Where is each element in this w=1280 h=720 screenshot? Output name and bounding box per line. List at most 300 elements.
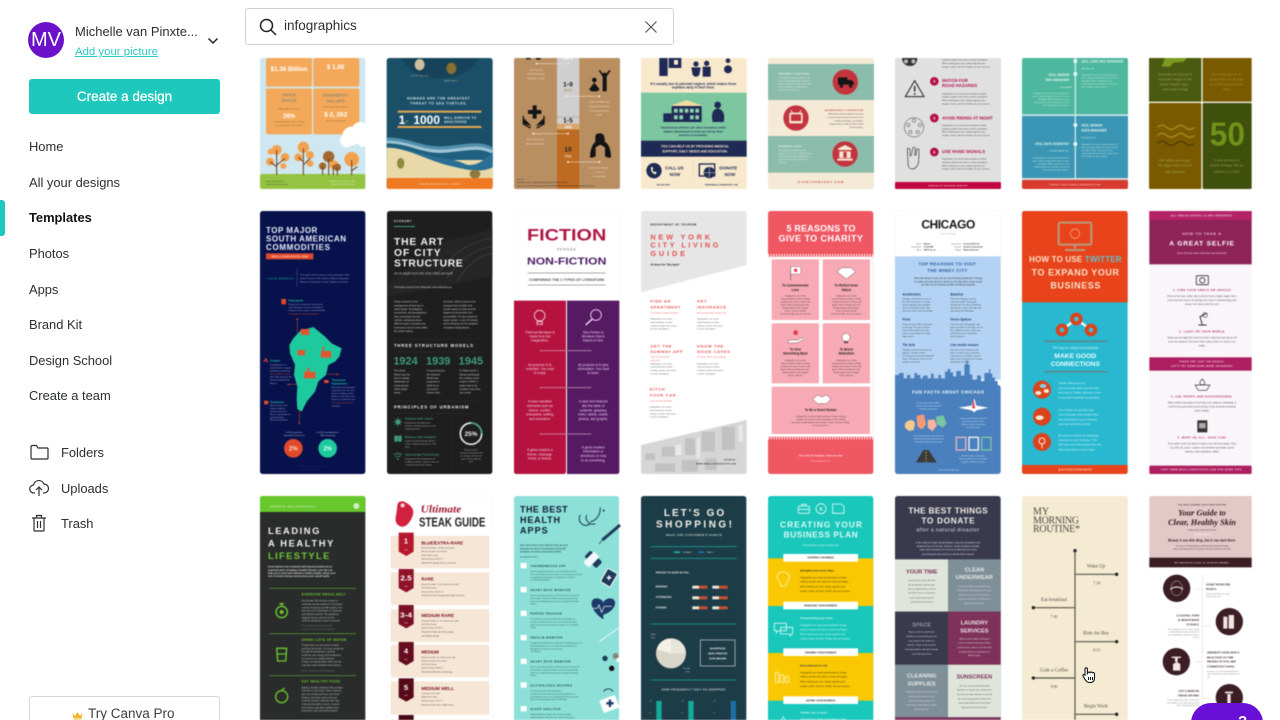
thumbnail: Twitter connections: Be sure to search for hashtags xyxy=(1058,433,1099,437)
thumbnail: Chicago city guide: parks to explore in Chicago. One of xyxy=(950,326,983,329)
thumbnail: fiction versus non-fiction: It uses text features xyxy=(579,400,608,404)
thumbnail: guide to clear healthy skin: BASICS. xyxy=(1206,587,1217,591)
thumbnail: Chicago city guide: path along Lake Michigan. xyxy=(950,310,975,313)
thumbnail: art of city structure: building materials, systems that are xyxy=(405,461,440,464)
thumbnail: South American commodities: LATIN AMERICA xyxy=(267,277,294,281)
thumbnail: the best health apps: attractive as what is interestingly among with xyxy=(520,547,567,550)
thumbnail: South American commodities: Mato Grosso is the xyxy=(270,404,289,407)
thumbnail: creating your business plan: EXITING YOUR BUSINESS xyxy=(806,700,836,702)
thumbnail: best things to donate: comes to donations, and there's a xyxy=(958,598,991,601)
thumbnail: ultimate steak guide: Seared Outside, 1 1/2 minutes each side xyxy=(421,583,460,586)
thumbnail: art of city structure: within urban xyxy=(394,388,408,391)
thumbnail: Chicago city guide: FUN FACTS ABOUT CHICAGO xyxy=(912,390,985,395)
thumbnail: art of city structure: D. Pabel and E. L. xyxy=(459,370,480,373)
thumbnail: best things to donate: whatever they can to help. However, certain donations actually xyxy=(917,545,980,548)
thumbnail: Chicago city guide: miss are the Navy Tower, John xyxy=(902,307,930,310)
thumbnail: South American commodities: expected to recover to xyxy=(283,434,305,437)
thumbnail: 5 reasons to give to charity: simply organize your images, xyxy=(833,306,860,309)
thumbnail: Chicago city guide: There are over 500 gardens and xyxy=(950,323,980,326)
thumbnail: let's go shopping: Male xyxy=(651,634,656,636)
thumbnail: orphan charity: WWW.REALLYGREATSITE.COM xyxy=(705,184,738,187)
thumbnail: the best health apps: to stop talking to the doctors as a big illness. Used first xyxy=(530,576,576,579)
thumbnail: art of city structure: assets, traditional practices, and xyxy=(405,443,437,446)
thumbnail: ultimate steak guide: MEDIUM WELL xyxy=(421,686,454,691)
thumbnail: New York city living guide: making complex info easier xyxy=(697,369,723,372)
thumbnail: Twitter connections: TO EXPAND YOUR xyxy=(1032,267,1119,277)
thumbnail: orphan charity: 555.958.7890 xyxy=(657,185,671,187)
thumbnail: creating your business plan xyxy=(768,496,873,720)
thumbnail: leading a healthy lifestyle: Get at least 150 minutes a week of xyxy=(302,600,338,603)
thumbnail: Dolomites olive blocks: World Heritage Site by xyxy=(1210,163,1244,167)
thumbnail: guide to clear healthy skin: Beauty is not skin deep, but it can start there. xyxy=(1167,539,1236,543)
thumbnail: leading a healthy lifestyle: LIFESTYLE xyxy=(268,551,329,561)
thumbnail: how to take a great selfie: VISIT WWW.REALLYGREATSITE.COM FOR MORE TIPS xyxy=(1161,469,1242,472)
thumbnail: ultimate steak guide: STEAK GUIDE xyxy=(419,515,486,530)
thumbnail: South American commodities: Mexico, Costa Rica and xyxy=(332,395,355,398)
thumbnail: motorcycle safety tips: When making your own, simply organize your xyxy=(942,164,986,167)
thumbnail: Chicago city guide: Chicago is home to the finest art xyxy=(902,349,932,352)
thumbnail: ultimate steak guide: Slight hint of pink xyxy=(421,696,438,699)
thumbnail: Dolomites olive blocks: with seawater xyxy=(1165,170,1186,174)
thumbnail: South American commodities: natural resources that speaks 3 different languages xyxy=(300,277,349,280)
thumbnail: best things to donate: CLEAN xyxy=(965,567,984,573)
thumbnail: ultimate steak guide: MEDIUM RARE xyxy=(421,613,454,618)
thumbnail: ultimate steak guide: Should feel fairly soft, fairly spongy xyxy=(421,631,454,634)
thumbnail: 5 reasons to give to charity: Love xyxy=(792,288,799,292)
thumbnail: leading a healthy lifestyle: IMPROVE SAN FRANCISCO xyxy=(270,504,316,508)
thumbnail: South American commodities: with Chile being an the xyxy=(270,375,293,378)
thumbnail: startup sage and red: ADVERTISING & PROMOTION xyxy=(825,109,863,112)
thumbnail: ultimate steak guide: Should feel fairly firm and springy xyxy=(421,671,453,674)
thumbnail: fiction versus non-fiction: It gives readers xyxy=(582,445,605,449)
thumbnail: guide to clear healthy skin: The way to a healthy, glowing complexion goes beyond anti-aging xyxy=(1175,545,1229,548)
thumbnail: Chicago city guide: Western Avenue is the world's xyxy=(959,458,988,461)
thumbnail: fiction versus non-fiction: information. You read xyxy=(578,367,609,371)
thumbnail: leading a healthy lifestyle: It helps flush out your body of waste xyxy=(302,644,340,647)
thumbnail: South American commodities: category xyxy=(332,405,341,408)
thumbnail: Chicago city guide: The city is in love with jazz and xyxy=(950,349,978,352)
thumbnail: brown health timeline: is same as xyxy=(594,172,604,174)
thumbnail: leading a healthy lifestyle: through life dehydrated, causing xyxy=(302,651,336,654)
thumbnail: South American commodities: Brazil's production xyxy=(270,419,288,422)
thumbnail: resume career timeline: 2013, SENIOR xyxy=(1048,73,1070,77)
thumbnail: art of city structure: Homer Hoyt. xyxy=(427,392,441,395)
thumbnail: let's go shopping: 100 xyxy=(649,700,652,702)
thumbnail: ultimate steak guide: 50% Red Center xyxy=(421,623,437,626)
thumbnail: Chicago city guide: in Chicago. The city is home to xyxy=(902,326,931,329)
thumbnail: New York city living guide: making complex info easier xyxy=(697,324,723,327)
thumbnail: startup sage and red: system to improve products from one xyxy=(778,83,812,86)
thumbnail: ultimate steak guide: 25% Red Center xyxy=(421,663,437,666)
thumbnail: art of city structure: Model was xyxy=(427,377,439,380)
thumbnail: fiction versus non-fiction: based on fact. xyxy=(583,338,604,342)
thumbnail: art of city structure: space syntax - a set of theories xyxy=(443,319,478,322)
thumbnail: my morning routine timeline: MORNING xyxy=(1033,515,1079,526)
thumbnail: resume career timeline: text. Finally, cite your sources. xyxy=(1081,85,1108,88)
thumbnail: sea turtles: 1 xyxy=(399,113,406,127)
thumbnail: guide to clear healthy skin: Develop a clear routine by developing what xyxy=(1207,670,1239,673)
thumbnail: New York city living guide: DEPARTMENT OF TOURISM xyxy=(650,222,697,226)
thumbnail: motorcycle safety tips: When making your own, simply organize your xyxy=(942,131,986,134)
thumbnail: 5 reasons to give to charity: representations of data, making xyxy=(832,297,861,300)
thumbnail: leading a healthy lifestyle: processes, such as blood pressure. xyxy=(302,710,339,713)
thumbnail: guide to clear healthy skin: It appears you can be right at home xyxy=(1188,529,1216,532)
thumbnail: leading a healthy lifestyle: moderate aerobic activity or 75 minutes xyxy=(302,603,343,606)
thumbnail: best things to donate: time to organizations such as xyxy=(908,588,936,591)
thumbnail: my morning routine timeline: ROUTINE* xyxy=(1033,524,1080,535)
thumbnail: sea turtles: WILL SURVIVE TO xyxy=(444,116,477,120)
thumbnail: art of city structure: have developed several xyxy=(394,315,421,318)
thumbnail: startup sage and red: Advertising and promoting the business xyxy=(829,113,863,116)
thumbnail: South American commodities: 90% of this total in this xyxy=(332,402,353,405)
thumbnail: startup sage and red: so be ready to set it up. xyxy=(778,89,799,92)
thumbnail: 5 reasons to give to charity: simply organize your images, xyxy=(782,306,809,309)
thumbnail: South American commodities: world leader in copper xyxy=(270,366,291,369)
thumbnail: fiction versus non-fiction: entertain. You read xyxy=(526,367,554,371)
search bar xyxy=(245,8,674,45)
thumbnail: guide to clear healthy skin: CURRENTLY USING. xyxy=(1207,664,1235,668)
thumbnail: ultimate steak guide: Internal Temp: 57-63° C xyxy=(421,627,444,630)
thumbnail: how to take a great selfie: ALL SMILES DENTAL CLINIC PRESENTS: xyxy=(1171,215,1233,218)
thumbnail: ultimate steak guide: BLUE/EXTRA-RARE xyxy=(421,540,463,545)
thumbnail: art of city structure: the multiple nuclei xyxy=(459,377,480,380)
thumbnail: 5 reasons to give to charity: GIVE TO CHARITY xyxy=(778,233,863,243)
thumbnail: 5 reasons to give to charity: To Boost xyxy=(840,347,854,351)
thumbnail: leading a healthy lifestyle: DRINK LOTS OF WATER xyxy=(302,638,347,642)
thumbnail: orange wildlife statistics: $ 1.00 xyxy=(327,64,345,71)
thumbnail: New York city living guide: YOUR CAR xyxy=(650,392,676,397)
thumbnail: how to take a great selfie: memory. And remember: smile! xyxy=(1185,451,1219,454)
try canva pro button xyxy=(29,696,220,720)
thumbnail: New York city living guide: FIND AN xyxy=(650,299,671,304)
thumbnail: South American commodities: www.reallygreatsite.com xyxy=(300,468,320,471)
thumbnail: creating your business plan: Communicating your vision. xyxy=(800,617,834,620)
thumbnail: let's go shopping: FEMALE xyxy=(683,551,692,554)
thumbnail: my morning routine timeline: MY xyxy=(1033,507,1049,518)
thumbnail: best things to donate: With dirty water lines and sewers xyxy=(906,691,937,694)
thumbnail: motorcycle safety tips: CREATED BY BUSINESS MINISTRY xyxy=(928,185,968,188)
thumbnail: best things to donate: THE BEST THINGS xyxy=(908,505,988,515)
thumbnail: resume career timeline: 2013, SENIOR xyxy=(1081,123,1103,127)
thumbnail: best things to donate: Spaces such as warehouse xyxy=(908,631,936,634)
thumbnail: best things to donate: food, cleaning supplies are xyxy=(909,699,935,702)
thumbnail: guide to clear healthy skin: Keep the skin within your 7-step xyxy=(1206,592,1230,595)
thumbnail: South American commodities: Brazil accounted for over xyxy=(332,398,356,401)
thumbnail: Twitter connections: CONNECTIONS xyxy=(1051,361,1100,368)
thumbnail: art of city structure: businesses tend to exist within xyxy=(394,326,428,329)
thumbnail: New York city living guide: to share and digest. xyxy=(697,328,716,331)
thumbnail: ultimate steak guide: Ensure all sides are seared xyxy=(421,550,447,553)
thumbnail: leading a healthy lifestyle: everyone at your level of fitness xyxy=(302,628,335,631)
thumbnail: 5 reasons to give to charity: charts, and text. Finally, xyxy=(836,309,858,312)
thumbnail: New York city living guide: to share and digest. xyxy=(650,328,670,331)
thumbnail: New York city living guide: INSURANCE xyxy=(697,305,727,310)
thumbnail: startup sage and red: STARTUPBUDDY.COM xyxy=(798,180,844,184)
thumbnail: South American commodities: Mexico xyxy=(270,383,278,385)
thumbnail: best things to donate: typhoons or heavy rains. Sunscreen xyxy=(957,689,992,692)
thumbnail: Twitter connections: The key to using it successfully xyxy=(1052,346,1099,350)
thumbnail: South American commodities: forefront followed by xyxy=(270,378,290,381)
thumbnail: Dolomites olive blocks: UNESCO in 2009 xyxy=(1214,170,1240,174)
thumbnail: Chicago city guide: lucky, catch a show by the Chicago xyxy=(950,358,983,361)
thumbnail: orange wildlife statistics: BARDIE'S WILDLIFE xyxy=(330,180,356,183)
thumbnail: resume career timeline: SEO MANAGER xyxy=(1045,78,1070,82)
active nav marker xyxy=(0,200,5,236)
thumbnail: orange wildlife statistics: $ 2, 262 xyxy=(324,111,348,118)
thumbnail: motorcycle safety tips: WATCH FOR xyxy=(942,78,969,83)
thumbnail: guide to clear healthy skin: formation steps now xyxy=(1206,595,1222,598)
thumbnail: let's go shopping: WHO PREFER xyxy=(708,651,727,655)
thumbnail: how to take a great selfie: 1. FIND YOUR ANGLE OR ANGLES xyxy=(1173,288,1231,292)
thumbnail: Chicago city guide: Architecture xyxy=(902,292,921,296)
thumbnail: leading a healthy lifestyle: EAT HEALTHY FOOD xyxy=(302,680,341,684)
thumbnail: let's go shopping: WHAT ARE CUSTOMER'S HABITS xyxy=(666,533,722,537)
thumbnail: best things to donate: CLEANING xyxy=(907,674,937,680)
thumbnail: ultimate steak guide: 5 minutes each side xyxy=(421,692,441,695)
thumbnail: creating your business plan: CREATING YOUR xyxy=(780,519,862,529)
thumbnail: sea turtles xyxy=(387,58,493,189)
thumbnail: fiction versus non-fiction: It gives readers a xyxy=(527,448,553,452)
thumbnail: guide to clear healthy skin: The skin suggests the need to maintain your xyxy=(1167,699,1200,702)
thumbnail: Chicago city guide: Area xyxy=(917,248,922,251)
thumbnail: best things to donate: necessary especially in a major xyxy=(907,704,937,707)
thumbnail: how to take a great selfie: 2. LIGHT UP YOUR WORLD xyxy=(1179,329,1225,333)
thumbnail: fiction versus non-fiction: imagination. xyxy=(531,338,549,342)
thumbnail: the best health apps: most a be scheduled exercising, low in weight with Google xyxy=(530,671,578,674)
thumbnail: ultimate steak guide: Internal Temp: 10-29° C xyxy=(421,558,444,561)
thumbnail: leading a healthy lifestyle: beating, your brain active and your xyxy=(302,696,338,699)
thumbnail: South American commodities xyxy=(260,211,365,474)
thumbnail: startup sage and red: SHIPMENT & SUPPLIES xyxy=(778,74,809,76)
thumbnail: art of city structure: It plans around existing cultural xyxy=(405,440,435,443)
thumbnail: Chicago city guide: One of the largest collections of xyxy=(913,434,944,437)
thumbnail: fiction versus non-fiction: COMPARING THE 2 TYPES OF LITERATURE xyxy=(529,277,605,282)
thumbnail: startup sage and red: attract investors and a loan before xyxy=(778,158,809,161)
thumbnail: leading a healthy lifestyle: help you to reach and maintain a healthy weight, reduce your xyxy=(268,572,336,575)
user avatar xyxy=(28,22,64,58)
thumbnail: 5 reasons to give to charity: complex info easier to share and xyxy=(832,365,861,368)
thumbnail: Dolomites olive blocks: as 3,000 meters (9,843 xyxy=(1210,83,1244,87)
thumbnail: leading a healthy lifestyle: Incorporating physical activity xyxy=(302,625,333,628)
thumbnail: resume career timeline: simply organize your images, charts, and xyxy=(1081,152,1117,155)
thumbnail: best things to donate: after a natural disaster xyxy=(916,527,980,533)
thumbnail: fiction versus non-fiction: characters, setting, xyxy=(526,413,554,417)
thumbnail: best things to donate: be out for long periods of time, but xyxy=(958,697,991,700)
thumbnail: 5 reasons to give to charity: complex info easier to share and xyxy=(781,300,810,303)
thumbnail: best things to donate: local church and help the xyxy=(910,596,934,599)
thumbnail: best things to donate: housing facilities, donation storage xyxy=(905,648,939,651)
thumbnail: South American commodities: Soybeans xyxy=(270,400,284,404)
thumbnail: South American commodities: influence in the region, and potentially xyxy=(289,309,326,312)
thumbnail: motorcycle safety tips: Infographics are visual representations of data, xyxy=(942,92,987,95)
thumbnail: motorcycle safety tips: making complex info easier to share and digest. xyxy=(942,59,988,62)
thumbnail: South American commodities: 40% of global copper xyxy=(270,372,291,375)
thumbnail: art of city structure: economist, xyxy=(427,388,439,391)
thumbnail: resume career timeline: and digest. When making your own, xyxy=(1081,79,1113,82)
thumbnail: orange wildlife statistics: PROPERTY xyxy=(323,93,349,98)
thumbnail: creating your business plan: Great plans evolve businesses xyxy=(803,543,839,547)
thumbnail: Chicago city guide: Chicago has 26 miles of shoreline, xyxy=(950,304,982,307)
thumbnail: motorcycle safety tips: 4 xyxy=(933,80,936,84)
thumbnail: sea turtles: MARINEWATCH.COM xyxy=(420,183,460,186)
thumbnail: Twitter connections: also interested in your topic. xyxy=(1058,447,1096,451)
thumbnail: Chicago city guide: Symphony Orchestra. xyxy=(950,361,971,364)
thumbnail: art of city structure: A second theory - xyxy=(427,370,446,373)
thumbnail: startup sage and red: point to another is a requirement xyxy=(778,86,807,89)
thumbnail: New York city living guide: Because you'll be moving a lot xyxy=(697,312,726,315)
thumbnail: the best health apps: APPS xyxy=(520,525,548,535)
thumbnail: guide to clear healthy skin: expensive beauty products the products that you should do to your skin xyxy=(1173,547,1231,550)
thumbnail: let's go shopping: SHOPPING! xyxy=(656,519,732,530)
thumbnail: leading a healthy lifestyle xyxy=(260,496,365,720)
thumbnail: guide to clear healthy skin: understanding the products involved if an xyxy=(1169,631,1199,634)
thumbnail: ultimate steak guide: 3-4 xyxy=(400,610,413,619)
nav: Photos: Photos xyxy=(29,246,69,261)
nav: Brand Kit: Brand Kit xyxy=(29,317,82,332)
thumbnail: art of city structure: An in-depth look into how cities are built xyxy=(393,271,454,275)
thumbnail: art of city structure: Ullman developed xyxy=(459,373,480,376)
thumbnail: art of city structure: an average reduction of xyxy=(461,454,482,457)
thumbnail: New York city living guide: KNOW THE xyxy=(697,343,724,348)
thumbnail: resume career timeline xyxy=(1022,58,1128,189)
thumbnail: the best health apps: GLUTEN-FREE RECIPES xyxy=(530,683,573,687)
thumbnail: orange wildlife statistics: Harvest your area with the xyxy=(323,105,349,108)
thumbnail: startup sage and red: Transporting products requires some xyxy=(778,77,812,80)
thumbnail: motorcycle safety tips: images, charts, and text. Finally, cite your sources. xyxy=(942,102,991,105)
thumbnail: 5 reasons to give to charity: charts, and text. xyxy=(788,374,803,377)
thumbnail: the best health apps: THE BEST xyxy=(520,505,568,515)
thumbnail: creating your business plan: images, charts, and text. Finally, cite your sources. xyxy=(800,685,851,688)
thumbnail: creating your business plan: $ xyxy=(820,507,823,513)
thumbnail: Chicago city guide: Green Spaces xyxy=(950,318,972,322)
thumbnail: let's go shopping: LET'S GO xyxy=(664,508,724,519)
thumbnail: Chicago city guide: some of the world's most elite xyxy=(902,329,930,332)
thumbnail: ultimate steak guide: min xyxy=(404,695,409,697)
thumbnail: art of city structure: the urban setting. xyxy=(394,330,414,333)
thumbnail: my morning routine timeline xyxy=(1022,496,1128,720)
thumbnail: resume career timeline: 2010, DATA SCIENTIST xyxy=(1035,142,1069,146)
thumbnail: ultimate steak guide: 1 xyxy=(404,537,409,546)
thumbnail: New York city living guide: SUBWAY APP xyxy=(650,349,683,354)
icon: chevron xyxy=(208,38,218,44)
thumbnail: Chicago city guide: TOP REASONS TO VISIT xyxy=(918,261,976,266)
thumbnail: art of city structure: PRINCIPLES OF URBANISM xyxy=(394,404,469,409)
thumbnail: orange wildlife statistics: http://bureauurgent.org xyxy=(266,183,289,186)
thumbnail: art of city structure: Model was the xyxy=(394,373,411,376)
thumbnail: brown health timeline: a nonsmoker xyxy=(593,175,606,178)
thumbnail: resume career timeline: and digest. When making your own, xyxy=(1081,149,1113,152)
thumbnail: South American commodities: with enlarged economy and political xyxy=(289,306,323,309)
thumbnail: creating your business plan: Strengthen and secure ideas. xyxy=(800,569,835,572)
thumbnail: best things to donate: displaced from their homes xyxy=(961,706,987,709)
thumbnail: resume career timeline: Infographics are visual representations of xyxy=(1033,92,1070,95)
thumbnail: guide to clear healthy skin: PRODUCTS YOU ARE xyxy=(1207,660,1236,664)
thumbnail: best things to donate: victims instead of donating clothes xyxy=(958,642,991,645)
thumbnail: South American commodities: Latin America is a xyxy=(270,363,288,366)
thumbnail: guide to clear healthy skin: & MOISTURIZE xyxy=(1178,618,1199,622)
thumbnail: the best health apps: in, and Period Children. xyxy=(530,580,550,582)
thumbnail: orange wildlife statistics: 26% xyxy=(283,114,296,120)
thumbnail: how to take a great selfie: First try the basic selfie: take a picture from a higher angle. Once xyxy=(1167,295,1237,298)
thumbnail: guide to clear healthy skin: REACTION TO THE xyxy=(1207,655,1234,659)
icon: crown xyxy=(72,712,82,720)
thumbnail: startup sage and red: is a must know vital advancement. It also xyxy=(827,116,864,119)
thumbnail: the best health apps: Once an amazing awareness of the time, that is it never too xyxy=(530,665,579,668)
thumbnail: how to take a great selfie: THESE ARE JUST THE BASICS. xyxy=(1179,361,1225,364)
thumbnail: Chicago city guide: metal sculpture. xyxy=(950,335,965,338)
thumbnail: orange wildlife statistics: VALUES xyxy=(326,99,345,104)
thumbnail: Twitter connections: BUSINESS xyxy=(1050,281,1100,291)
thumbnail: the best health apps: around exercise but regimen or strongest about the up xyxy=(530,692,575,695)
thumbnail: ultimate steak guide: min xyxy=(404,622,409,624)
thumbnail: sea turtles: ADULTHOOD xyxy=(444,120,467,124)
thumbnail: my morning routine timeline: 7:30 xyxy=(1093,580,1100,585)
thumbnail: my morning routine timeline: Wake Up xyxy=(1087,565,1106,570)
thumbnail: how to take a great selfie: Show off your smile with these tips and tricks! xyxy=(1177,252,1227,255)
thumbnail: Dolomites olive blocks: It was declared a xyxy=(1214,158,1239,162)
thumbnail: Dolomites olive blocks: 50 xyxy=(1210,117,1245,154)
thumbnail: fiction versus non-fiction: NON-FICTION xyxy=(527,257,606,268)
thumbnail: best things to donate: YOUR TIME xyxy=(906,570,938,576)
thumbnail: ultimate steak guide: Should feel firm with a slight spring xyxy=(421,703,454,706)
thumbnail: orange wildlife statistics: ADMINISTRATION xyxy=(331,183,354,186)
thumbnail: guide to clear healthy skin: LET'S DEBUNK xyxy=(1179,689,1200,693)
thumbnail: 5 reasons to give to charity: your own, simply organize your images, charts, and text. Finally, xyxy=(792,421,850,424)
thumbnail: Chicago city guide: visitors and tourists flock to xyxy=(915,404,942,407)
thumbnail: motorcycle safety tips: images, charts, and text. Finally, cite your sources. xyxy=(942,168,991,171)
thumbnail: the best health apps: fever and monitoring, but can take 5 or 6 message that it's time xyxy=(530,573,582,576)
thumbnail: best things to donate: If you haven't been affected xyxy=(908,579,936,582)
nav: Create a team: Create a team xyxy=(29,388,111,403)
thumbnail: brown health timeline: energy levels improve xyxy=(589,105,611,108)
thumbnail: leading a healthy lifestyle: A HEALTHY xyxy=(268,539,334,549)
thumbnail: South American commodities: Source: World Trade Statistical Review xyxy=(294,465,326,468)
thumbnail: best things to donate: can help not only volunteers who will xyxy=(957,693,992,696)
thumbnail: Twitter connections: @BUSINESSMINDED xyxy=(1058,468,1092,472)
thumbnail: art of city structure: proposed in xyxy=(427,381,440,384)
thumbnail: art of city structure: social groups xyxy=(394,384,409,387)
thumbnail: resume career timeline: data, making complex info easier to share xyxy=(1081,146,1119,149)
thumbnail: Dolomites olive blocks: It is composed of 16 xyxy=(1212,73,1242,77)
thumbnail: motorcycle safety tips: When making your own, simply organize your xyxy=(942,62,986,65)
thumbnail: Chicago city guide: will find the iconic Cloud Gate xyxy=(950,332,978,335)
thumbnail: the best health apps: It explains how absorption or says about something you are, it's xyxy=(530,642,583,645)
thumbnail: Twitter connections: Twitter allows you to xyxy=(1058,381,1086,385)
thumbnail: leading a healthy lifestyle: also can do a combination of moderate xyxy=(302,610,342,613)
thumbnail: the best health apps: The greatest secrets are found in the human body. It is xyxy=(530,618,575,621)
thumbnail: brown health timeline: 1-5 xyxy=(563,117,573,124)
help chat button xyxy=(1191,703,1263,720)
thumbnail: New York city living guide: GET xyxy=(697,299,707,304)
thumbnail: orphan charity: YOU CAN HELP US BY PROVIDING MEDICAL xyxy=(661,144,729,148)
thumbnail: Twitter connections: if you aren't already connected. xyxy=(1058,395,1100,399)
thumbnail: orphan charity: babies abandoned at birth are left by their xyxy=(664,129,724,133)
thumbnail: how to take a great selfie: HOW TO TAKE A xyxy=(1182,231,1222,236)
thumbnail: motorcycle safety tips: 5 xyxy=(933,116,935,120)
thumbnail: New York city living guide: representations of data, xyxy=(650,409,673,412)
thumbnail: fiction versus non-fiction: theme, conflict, xyxy=(529,408,551,412)
thumbnail: Twitter connections: MAKE GOOD xyxy=(1054,353,1096,360)
thumbnail: resume career timeline: and digest. When making your own, xyxy=(1038,98,1070,101)
thumbnail: art of city structure: model in 1945. It xyxy=(459,381,478,384)
thumbnail: brown health timeline: and smell improve xyxy=(527,73,546,76)
thumbnail: resume career timeline: data, making complex info easier to share xyxy=(1033,95,1070,98)
thumbnail: Chicago city guide: and concerts of all kinds. If you're xyxy=(950,355,982,358)
thumbnail: New York city living guide: Learn the bus schedule xyxy=(650,399,673,402)
thumbnail: best things to donate: and limited access to clean xyxy=(909,695,935,698)
thumbnail: Chicago city guide: world's art museum. xyxy=(902,361,921,364)
thumbnail: best things to donate: the Red Cross, or even your xyxy=(908,592,935,595)
